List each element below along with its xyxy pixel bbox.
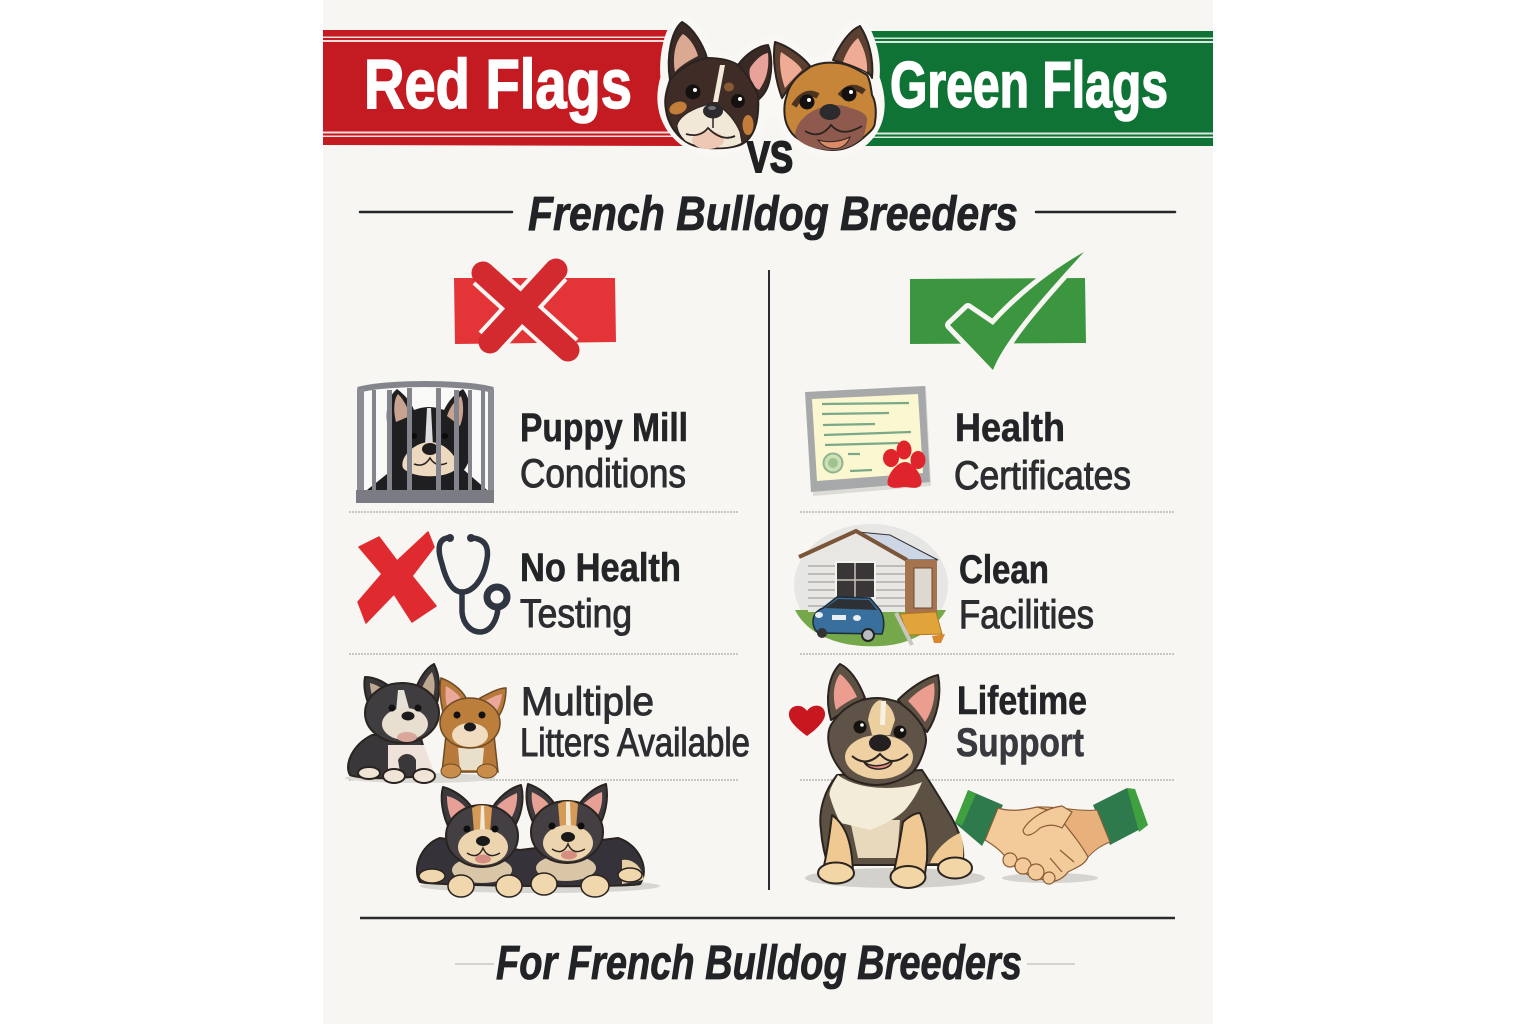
text: clean facilities: Clean bbox=[959, 548, 1049, 592]
heading: red flags: Red Flags bbox=[364, 45, 632, 123]
text: puppy mill conditions bbox=[520, 406, 688, 496]
icon: clean facility house bbox=[794, 524, 948, 646]
icon: dog in cage bbox=[356, 384, 494, 503]
text: lifetime support: Lifetime bbox=[957, 679, 1087, 723]
icon: tan dog head bbox=[774, 26, 876, 150]
heading: green flags: Green Flags bbox=[890, 48, 1168, 121]
icon: smiling dog bbox=[805, 664, 985, 888]
text: puppy mill conditions: Conditions bbox=[520, 452, 686, 496]
icon: sticker outline behind dog heads bbox=[665, 22, 877, 150]
text: clean facilities: Facilities bbox=[959, 593, 1094, 637]
text: health certificates: Certificates bbox=[954, 454, 1131, 498]
text: health certificates: Health bbox=[955, 406, 1065, 450]
icon: brown dog head bbox=[665, 22, 771, 149]
icon: two puppies multiple litters bbox=[345, 664, 506, 783]
text: health certificates bbox=[954, 406, 1131, 498]
panel: red flags list bbox=[345, 384, 750, 897]
icon: two puppies lying down bbox=[417, 784, 660, 897]
text: lifetime support: Support bbox=[956, 721, 1084, 765]
text: multiple litters available bbox=[520, 680, 750, 765]
icon: red x bbox=[358, 532, 436, 623]
icon: health certificate bbox=[805, 386, 931, 496]
text: multiple litters available: Litters Available bbox=[520, 721, 750, 765]
text: lifetime support bbox=[956, 679, 1087, 765]
icon: stethoscope bbox=[439, 534, 507, 632]
icon: green check badge bbox=[910, 252, 1086, 370]
icon: red x badge bbox=[454, 270, 616, 350]
paper background bbox=[323, 0, 1213, 1024]
heading: vs: VS bbox=[747, 133, 793, 182]
text: puppy mill conditions: Puppy Mill bbox=[520, 406, 688, 450]
panel: red flags banner bbox=[323, 30, 685, 146]
text: multiple litters available: Multiple bbox=[521, 680, 654, 724]
icon: handshake bbox=[955, 788, 1148, 884]
panel: green flags list bbox=[789, 386, 1148, 888]
text: no health testing: No Health bbox=[520, 546, 681, 590]
panel: green flags banner bbox=[855, 31, 1213, 146]
footer divider bbox=[360, 917, 1175, 919]
text: clean facilities bbox=[959, 548, 1094, 637]
icon: heart bbox=[789, 706, 825, 736]
title: french bulldog breeders: French Bulldog Breeders bbox=[528, 188, 1018, 241]
text: no health testing bbox=[520, 546, 681, 636]
footer text: For French Bulldog Breeders bbox=[496, 937, 1022, 990]
divider: center line bbox=[768, 270, 770, 890]
text: no health testing: Testing bbox=[520, 592, 632, 636]
